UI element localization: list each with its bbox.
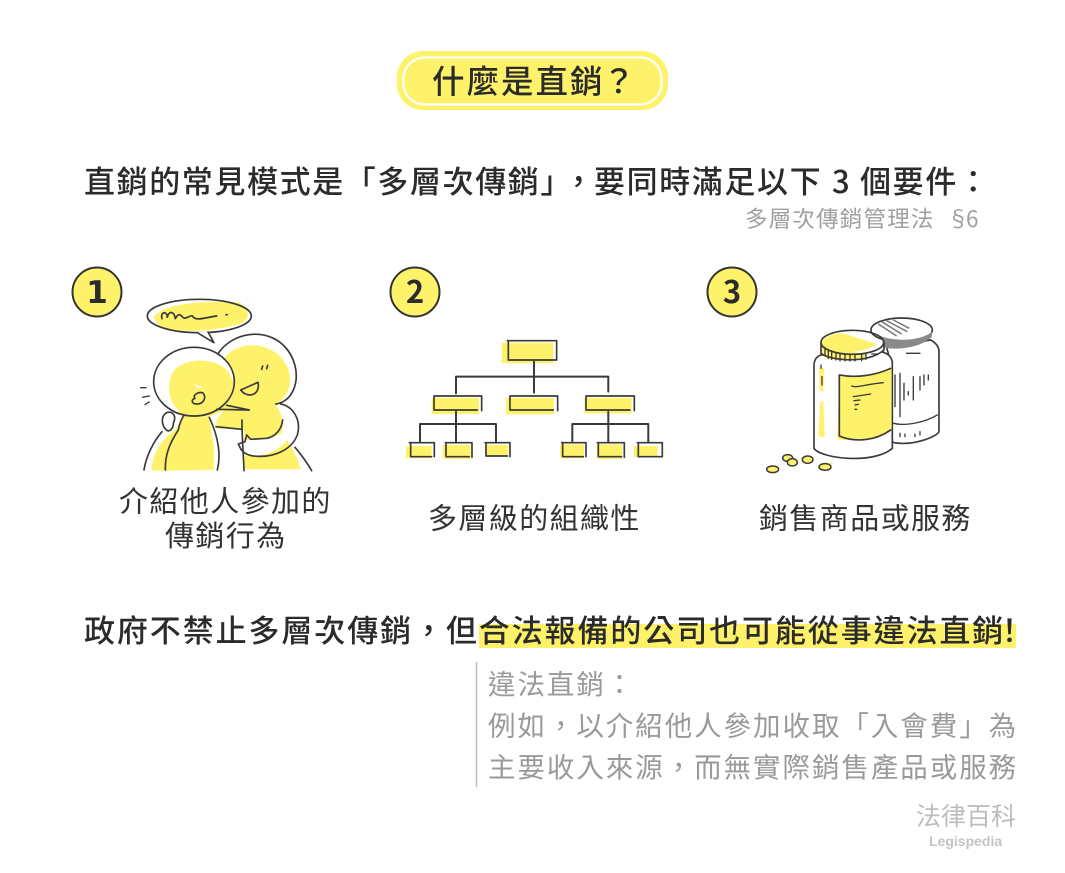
panel: requirement 1 <box>72 268 332 553</box>
panel: requirement 3 <box>708 267 972 536</box>
legal citation: 多層次傳銷管理法 <box>745 207 935 232</box>
icon: organization chart <box>406 341 662 459</box>
caption 1: 介紹他人參加的 <box>119 486 332 518</box>
logo: Legispedia: 法律百科 <box>916 803 1016 831</box>
caption 2: 多層級的組織性 <box>428 502 641 536</box>
note: definition of illegal direct selling: 違法直銷： <box>488 669 635 700</box>
back bottle <box>871 318 939 443</box>
icon: supplement bottles and pills <box>767 318 939 473</box>
heading: three requirements: 個要件： <box>860 165 990 200</box>
front bottle <box>814 330 892 458</box>
heading: three requirements: ， <box>563 165 596 200</box>
legal citation: 6 <box>966 202 980 234</box>
note: definition of illegal direct selling <box>476 662 1018 787</box>
heading: three requirements: 3 <box>832 157 851 202</box>
number badge 1 <box>72 268 122 316</box>
caption 1 <box>119 486 332 553</box>
legal citation: § <box>947 202 971 234</box>
logo: Legispedia: Legispedia <box>929 833 1002 849</box>
caption 3: 銷售商品或服務 <box>759 502 972 536</box>
heading: three requirements: 直銷的常見模式是「多層次傳銷」 <box>84 165 573 200</box>
warning statement: ！ <box>994 614 1027 649</box>
logo: Legispedia <box>916 803 1016 849</box>
warning statement: 政府不禁止多層次傳銷，但合法報備的公司也可能從事違法直銷 <box>84 614 1005 649</box>
caption 1: 傳銷行為 <box>165 520 287 553</box>
note: definition of illegal direct selling: 主要收入來源，而無實際銷售產品或服務 <box>488 752 1018 783</box>
title pill: 什麼是直銷？ <box>432 64 637 100</box>
icon: two people talking <box>141 299 312 471</box>
panel: requirement 2 <box>390 267 662 536</box>
number badge 2 <box>390 267 440 316</box>
number badge 1: 1 <box>86 275 108 311</box>
highlight bar <box>479 624 1016 648</box>
title pill <box>397 51 668 110</box>
pills <box>767 455 833 473</box>
heading: three requirements: 要同時滿足以下 <box>594 165 822 200</box>
number badge 3: 3 <box>723 267 741 312</box>
number badge 2: 2 <box>406 267 424 312</box>
number badge 3 <box>708 267 756 316</box>
note: definition of illegal direct selling: 例如，以介紹他人參加收取「入會費」為 <box>488 710 1018 742</box>
